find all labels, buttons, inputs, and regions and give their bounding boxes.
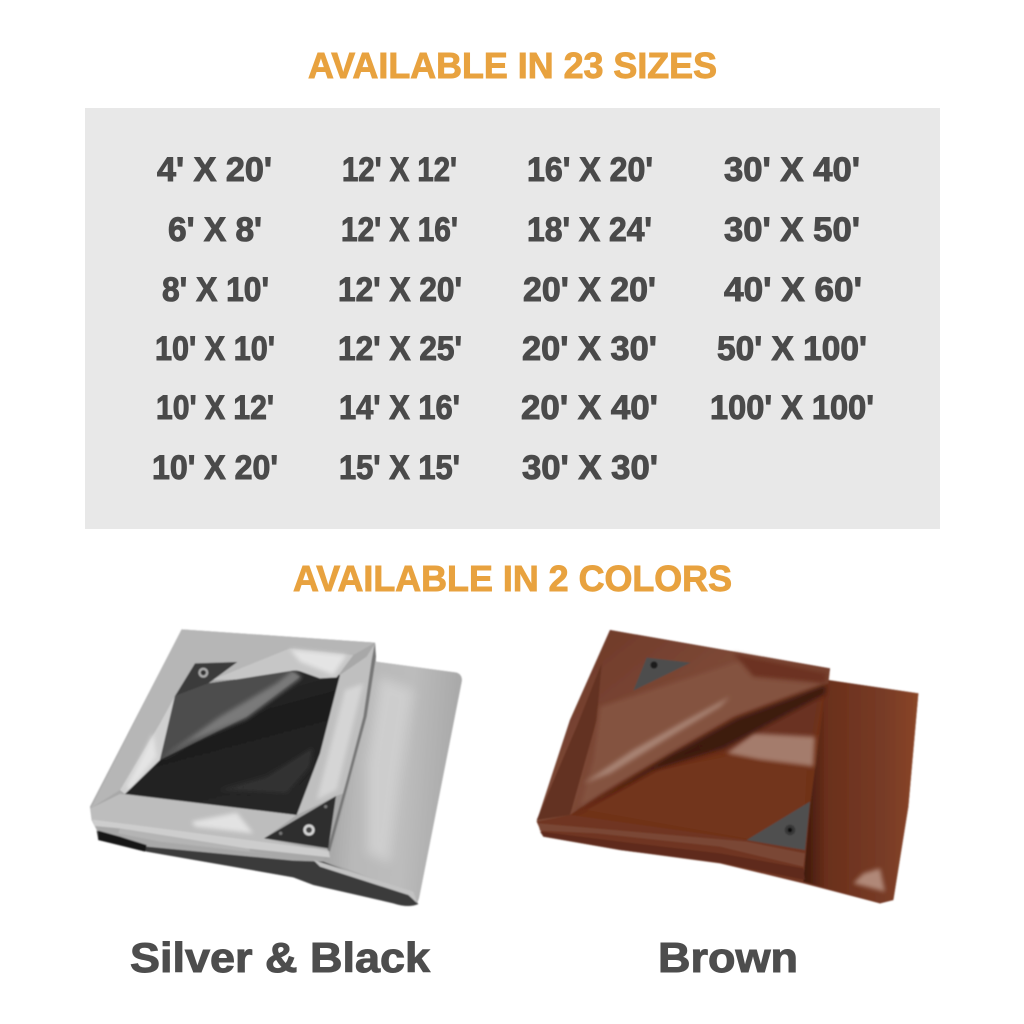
size column 2: 14' X 16' xyxy=(339,389,460,427)
size column 2 xyxy=(338,151,462,487)
panel: size list xyxy=(85,108,940,529)
size column 2: 12' X 12' xyxy=(342,151,457,189)
size column 1: 10' X 20' xyxy=(152,449,278,487)
size column 4: 100' X 100' xyxy=(710,389,874,427)
size column 3: 18' X 24' xyxy=(527,211,652,249)
image: silver and black tarp xyxy=(90,629,462,906)
size column 2: 15' X 15' xyxy=(339,449,460,487)
size column 4: 40' X 60' xyxy=(724,271,862,309)
size column 3: 30' X 30' xyxy=(522,449,658,487)
size column 4: 30' X 50' xyxy=(724,211,860,249)
size column 3: 20' X 20' xyxy=(523,271,656,309)
size column 3: 16' X 20' xyxy=(527,151,653,189)
image: brown tarp xyxy=(537,630,918,903)
heading: available colors: AVAILABLE IN 2 COLORS xyxy=(293,558,732,599)
size column 1: 4' X 20' xyxy=(157,151,272,189)
label: brown: Brown xyxy=(658,934,798,981)
size column 4: 50' X 100' xyxy=(717,330,867,368)
size column 4 xyxy=(710,151,874,427)
size column 4: 30' X 40' xyxy=(724,151,860,189)
size column 3: 20' X 40' xyxy=(521,389,658,427)
size column 2: 12' X 25' xyxy=(338,330,462,368)
size column 1 xyxy=(152,151,278,487)
size column 2: 12' X 20' xyxy=(338,271,462,309)
size column 1: 10' X 12' xyxy=(156,389,274,427)
heading: available sizes: AVAILABLE IN 23 SIZES xyxy=(308,45,717,86)
label: silver and black: Silver & Black xyxy=(130,934,431,981)
size column 3: 20' X 30' xyxy=(522,330,657,368)
size column 1: 10' X 10' xyxy=(155,330,275,368)
size column 1: 8' X 10' xyxy=(162,271,269,309)
size column 2: 12' X 16' xyxy=(341,211,458,249)
size column 1: 6' X 8' xyxy=(168,211,262,249)
size column 3 xyxy=(521,151,658,487)
